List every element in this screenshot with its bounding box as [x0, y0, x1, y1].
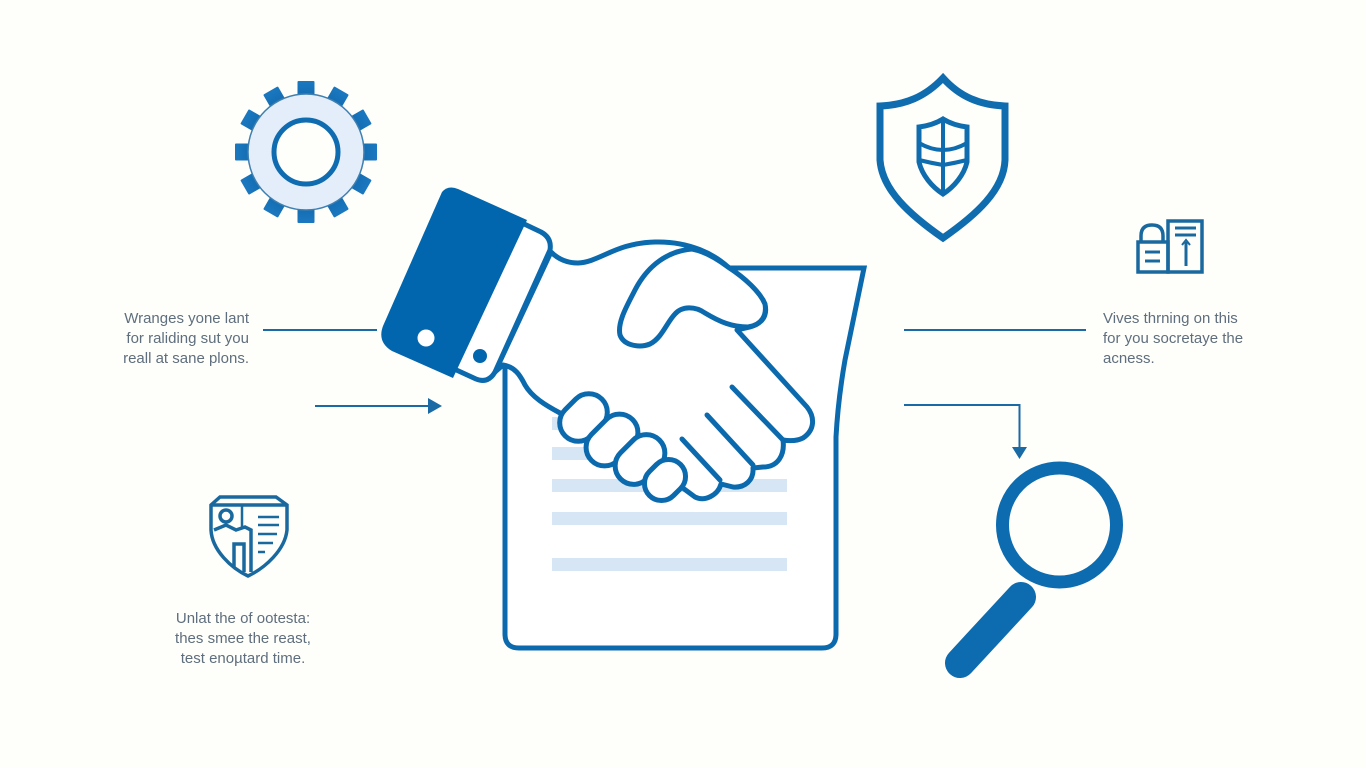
thumb [619, 249, 765, 346]
hand body [495, 242, 813, 499]
connector: left line [263, 329, 377, 331]
text block: bottom left: test enoµtard time. [181, 650, 305, 667]
text block: right: Vives thrning on this [1103, 310, 1238, 327]
cuff button [473, 349, 487, 363]
icon: lock and document [1138, 221, 1202, 272]
text block: bottom left: Unlat the of ootesta: [176, 610, 310, 627]
icon: shield [880, 78, 1005, 238]
icon: badge shield [211, 497, 287, 576]
text block: bottom left: thes smee the reast, [175, 630, 311, 647]
arrow: left [315, 398, 442, 414]
sleeve [381, 188, 527, 378]
text block: left: for raliding sut you [126, 330, 249, 347]
gripping fingers [552, 386, 693, 508]
document panel [505, 268, 864, 648]
icon: handshake [381, 188, 813, 508]
text block: left: Wranges yone lant [124, 310, 250, 327]
text block: right [1103, 310, 1243, 367]
icon: gear [235, 81, 377, 223]
icon: magnifying glass [960, 468, 1116, 663]
text block: left [123, 310, 250, 367]
finger creases [682, 387, 783, 480]
text block: right: acness. [1103, 350, 1155, 367]
text block: right: for you socretaye the [1103, 330, 1243, 347]
text block: left: reall at sane plons. [123, 350, 249, 367]
shirt cuff [452, 222, 550, 380]
arrow: right elbow [904, 405, 1027, 459]
document text lines [552, 417, 787, 571]
sleeve button [418, 330, 434, 346]
text block: bottom left [175, 610, 311, 667]
connector: right line [904, 329, 1086, 331]
